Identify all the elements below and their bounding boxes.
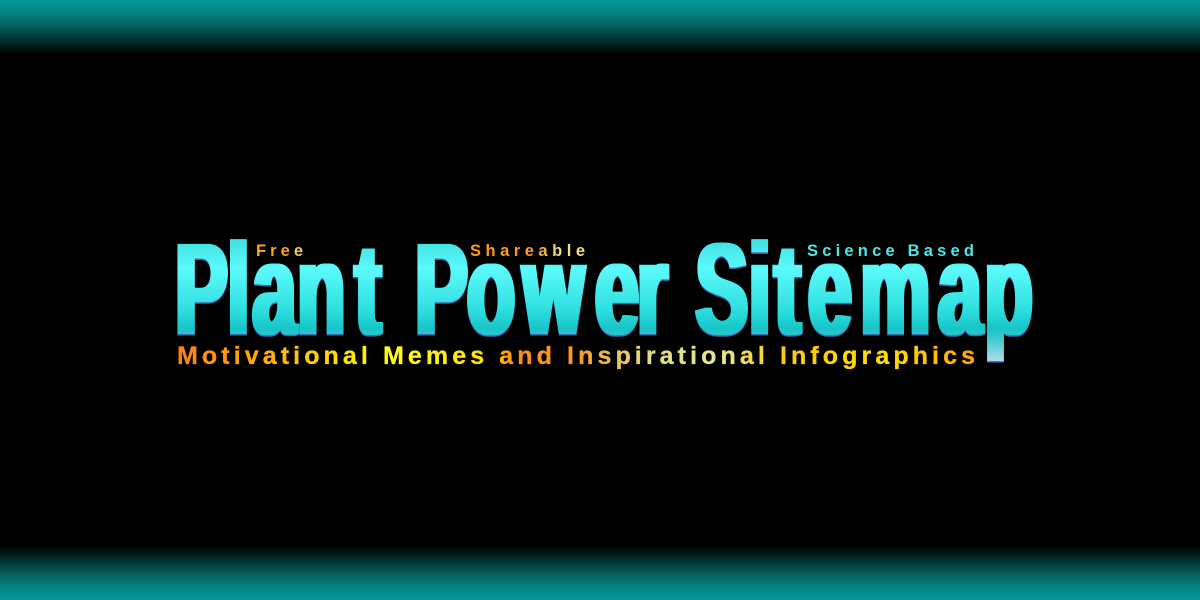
subtitle: Motivational Memes and Inspirational Infographics: Motivational Memes and Inspirational Infographics (177, 342, 975, 370)
bottom teal gradient band (0, 546, 1200, 600)
top teal gradient band (0, 0, 1200, 54)
title: Plant Power Sitemap: Plant Power Sitemap (175, 215, 1033, 362)
tagline: Science Based: Science Based (807, 242, 974, 260)
tagline: Shareable: Shareable (470, 242, 585, 260)
tagline: Free: Free (256, 242, 303, 260)
